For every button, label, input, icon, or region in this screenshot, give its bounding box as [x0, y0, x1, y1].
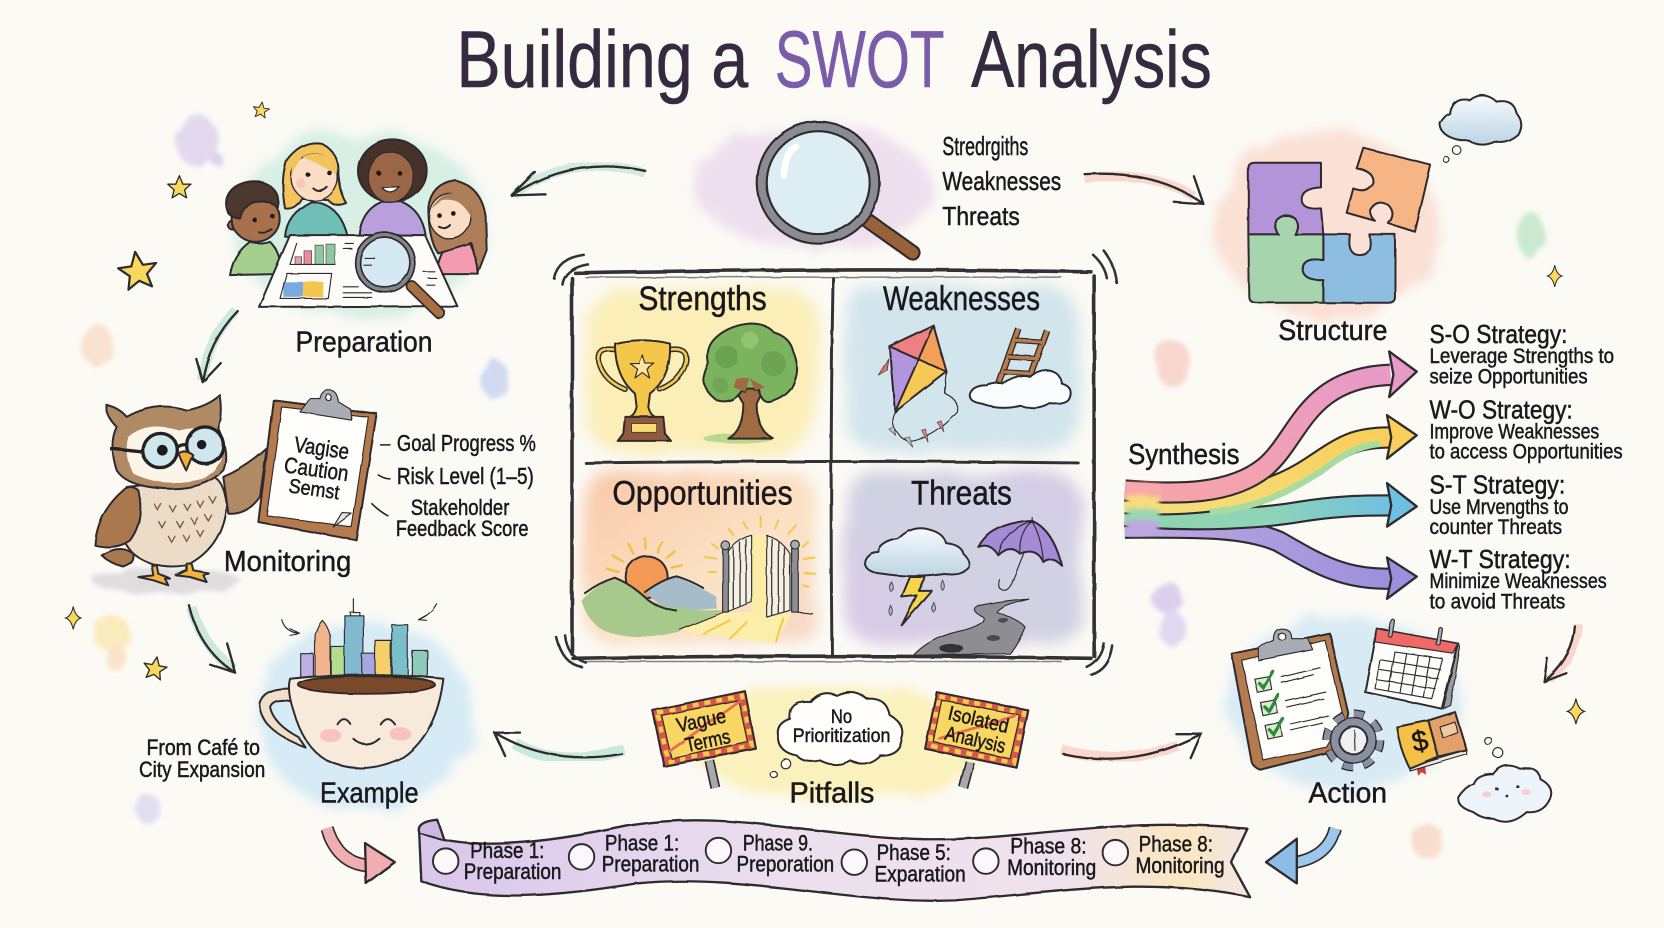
owl glasses: [110, 427, 223, 468]
sign: isolated: [925, 692, 1028, 768]
cup handle: [259, 689, 305, 747]
winding road: [913, 599, 1028, 655]
heading: Weaknesses: [883, 280, 1040, 318]
text: no prioritization: Prioritization: [793, 726, 890, 747]
phase: 4: Phase 5:: [877, 840, 951, 865]
arrow: preparation to monitoring: [196, 310, 238, 382]
text: isolated analysis: Analysis: [943, 723, 1008, 758]
panel: SWOT matrix: [554, 251, 1116, 674]
strategy: S-T: [1429, 472, 1568, 539]
strategy: W-O: [1429, 396, 1623, 464]
strategy: W-T: to avoid Threats: [1429, 590, 1565, 613]
arrow: yellow to W-O: [1125, 415, 1417, 512]
owl feet: [138, 565, 170, 585]
icons: checklist, gear, calendar, book, smiling cloud: [1232, 621, 1551, 822]
arrow: monitoring to example: [189, 605, 236, 673]
person: dark curly hair woman: [358, 139, 427, 235]
small motion arrows: [282, 604, 437, 635]
title: SWOT: [775, 15, 944, 105]
phase: 6: Phase 8:: [1139, 832, 1213, 857]
phase: 1: Phase 1:: [470, 838, 544, 863]
label: Example: Example: [320, 778, 419, 810]
owl arm: [223, 449, 267, 514]
arrow: magnifier to preparation: [512, 166, 645, 196]
title: Building a: [456, 15, 748, 105]
person: girl with brown hair: [428, 180, 487, 274]
text: SWOT list: Weaknesses: [942, 168, 1061, 196]
arrow: action to roadmap: [1266, 828, 1335, 883]
quadrant: strengths: [586, 280, 817, 452]
icon: sunrise and gate: [582, 517, 815, 644]
phase: 3: [706, 830, 834, 877]
arrow: synthesis to action: [1544, 624, 1579, 682]
label: Structure: Structure: [1278, 315, 1388, 347]
icon: owl and clipboard: [95, 390, 377, 585]
icon: trophy and tree: [599, 324, 797, 444]
panel: discovery magnifier and list: [693, 124, 1061, 253]
text: clipboard notes: Caution: [283, 452, 350, 486]
icon: puzzle pieces and thought cloud: [1248, 95, 1521, 303]
watercolor splashes: [82, 116, 1545, 859]
panel: monitoring: [92, 390, 536, 594]
icon: team of four people around a chart sheet: [226, 139, 487, 313]
matrix frame and dividers: [554, 251, 1116, 674]
gear: [1327, 714, 1380, 767]
ladder on cloud: [970, 329, 1071, 408]
icon: kite and ladder: [878, 325, 1071, 447]
text: SWOT list: [942, 133, 1061, 231]
checklist clipboard: [1232, 629, 1348, 770]
icon: storm, umbrella and road: [865, 517, 1062, 655]
wash: blue: [1227, 616, 1464, 790]
title: Analysis: [971, 15, 1212, 105]
owl head: [106, 395, 226, 489]
phase: 2: Preparation: [602, 852, 699, 877]
puzzle piece: orange: [1347, 148, 1431, 232]
owl body: [120, 477, 227, 566]
thought cloud: [771, 692, 903, 778]
strategy: W-T: [1429, 546, 1607, 613]
cup face: [320, 729, 341, 742]
phase: 3: Preporation: [736, 852, 834, 877]
wash: peach: [1215, 132, 1438, 319]
phase: 6: [1103, 832, 1225, 878]
sign post left: [709, 760, 715, 788]
city skyline: [301, 599, 427, 677]
owl tail: [102, 549, 134, 567]
text: caption: City Expansion: [139, 757, 265, 782]
coffee: [298, 676, 435, 694]
phase: 5: Monitoring: [1007, 855, 1096, 880]
label: Monitoring: Monitoring: [224, 546, 351, 578]
label: Synthesis: Synthesis: [1128, 439, 1240, 471]
text: clipboard notes: [283, 432, 351, 504]
arrow: pink to S-O: [1125, 351, 1417, 493]
chart sheet: [259, 235, 457, 307]
heading: Opportunities: [612, 474, 793, 512]
wash: mint: [231, 132, 490, 319]
strategy: S-T: S-T Strategy:: [1429, 472, 1565, 500]
text: no prioritization: No: [831, 707, 852, 728]
heading: Threats: [911, 474, 1012, 512]
wash: blue: [258, 621, 474, 812]
sign post right: [963, 762, 970, 788]
quadrant: weaknesses: [845, 280, 1080, 452]
text: vague terms: [675, 705, 733, 757]
puzzle piece: purple: [1248, 163, 1323, 234]
person: boy: [226, 181, 280, 275]
decorative stars: [66, 101, 1584, 724]
banner ribbon: [419, 820, 1250, 901]
tree: [703, 324, 797, 444]
label: Preparation: Preparation: [296, 326, 432, 358]
wash: yellow: [690, 686, 987, 801]
panel: structure: [1215, 95, 1521, 347]
strategy: W-O: Improve Weaknesses: [1429, 421, 1599, 444]
glowing gate: [680, 517, 815, 644]
arrow: list to structure: [1085, 174, 1203, 204]
phase: 3: Phase 9.: [743, 830, 813, 855]
panel: pitfalls: [653, 686, 1028, 810]
person: blonde woman: [283, 143, 348, 237]
owl shadow: [92, 568, 241, 594]
strategy: S-T: Use Mrvengths to: [1429, 496, 1568, 519]
storm cloud: [865, 528, 969, 625]
strategy: S-T: counter Threats: [1429, 516, 1562, 539]
quadrant: threats: [845, 471, 1080, 655]
owl wing: [95, 487, 140, 547]
phase: 1: [433, 838, 561, 884]
heading: Strengths: [638, 280, 767, 318]
text: caption: [139, 735, 265, 782]
trophy: [599, 340, 686, 441]
fill blue: [845, 287, 1080, 452]
text: SWOT list: Stredrgiths: [942, 133, 1028, 161]
strategy: W-O: W-O Strategy:: [1429, 396, 1573, 424]
text: clipboard notes: Semst: [287, 475, 341, 504]
icon: magnifying glass: [760, 124, 913, 253]
puzzle piece: blue: [1303, 234, 1395, 303]
magnifier: [358, 235, 439, 313]
strategy: S-O: S-O Strategy:: [1429, 321, 1567, 349]
panel: example: [139, 599, 474, 812]
text: metrics: Stakeholder: [411, 495, 510, 520]
text: no prioritization: [793, 707, 890, 747]
text: strategies: [1429, 321, 1623, 613]
strategy: W-T: W-T Strategy:: [1429, 546, 1571, 574]
puzzle piece: green: [1248, 215, 1323, 303]
rainbow stream: [1125, 351, 1417, 599]
phase: 6: Monitoring: [1136, 853, 1225, 878]
clipboard board: [258, 400, 377, 540]
sign: vague: [653, 691, 756, 766]
panel: preparation: [226, 132, 490, 358]
label: Pitfalls: Pitfalls: [790, 778, 874, 810]
sunrise over mountains: [582, 539, 723, 637]
text: metrics: Goal Progress %: [397, 430, 536, 456]
umbrella: [978, 517, 1062, 590]
quadrant: opportunities: [582, 471, 817, 644]
owl beak: [178, 451, 193, 471]
fill yellow: [586, 287, 817, 452]
phase: 5: Phase 8:: [1010, 834, 1087, 859]
strategy: S-O: Leverage Strengths to: [1429, 345, 1614, 368]
icon: city in coffee cup: [259, 599, 443, 768]
strategy: S-O: [1429, 321, 1614, 388]
phase: 5: [973, 834, 1096, 880]
phase: 1: Preparation: [464, 859, 561, 884]
title: [456, 15, 1212, 105]
stream overlay: soft colour tails: [1127, 489, 1159, 528]
text: SWOT list: Threats: [942, 203, 1020, 231]
strategy: W-T: Minimize Weaknesses: [1429, 570, 1607, 593]
text: metrics: Feedback Score: [396, 516, 528, 541]
smiling cloud: [1458, 737, 1551, 822]
phase: 4: [842, 840, 966, 886]
text: vague terms: Vague: [675, 705, 728, 737]
strategy: S-O: seize Opportunities: [1429, 365, 1588, 388]
text: dollar sign: $: [1409, 724, 1431, 759]
kite: [878, 325, 957, 447]
text: vague terms: Terms: [683, 726, 733, 757]
cup body: [289, 675, 443, 768]
fill purple grey: [845, 471, 1080, 643]
thought cloud: [1440, 95, 1521, 162]
arrow: example to roadmap: [327, 828, 395, 883]
phase: 2: Phase 1:: [605, 830, 679, 855]
phase: 4: Exparation: [874, 861, 966, 886]
panel: synthesis: [1125, 321, 1623, 613]
arrow: pitfalls to example: [495, 733, 624, 758]
calendar: [1365, 621, 1460, 709]
label: Action: Action: [1308, 778, 1387, 810]
text: clipboard notes: Vagise: [293, 432, 351, 464]
strategy: W-O: to access Opportunities: [1429, 441, 1623, 464]
text: caption: From Café to: [146, 735, 260, 760]
arrow: pitfalls to action: [1061, 734, 1201, 759]
arrow: purple to W-T: [1125, 528, 1417, 599]
text: metrics: [371, 430, 536, 541]
arrow: green-blue to S-T: [1125, 483, 1417, 527]
fill orange: [584, 471, 817, 643]
budget book: [1397, 712, 1467, 776]
panel: action: [1227, 616, 1551, 822]
owl feather marks: [154, 497, 216, 542]
text: isolated analysis: [943, 703, 1011, 758]
phase: 2: [569, 830, 699, 877]
roadmap banner: [419, 820, 1250, 901]
wash: purple: [693, 124, 931, 247]
text: isolated analysis: Isolated: [946, 703, 1011, 738]
icons: signs and thought cloud: [653, 691, 1028, 788]
text: metrics: Risk Level (1–5): [397, 463, 534, 489]
